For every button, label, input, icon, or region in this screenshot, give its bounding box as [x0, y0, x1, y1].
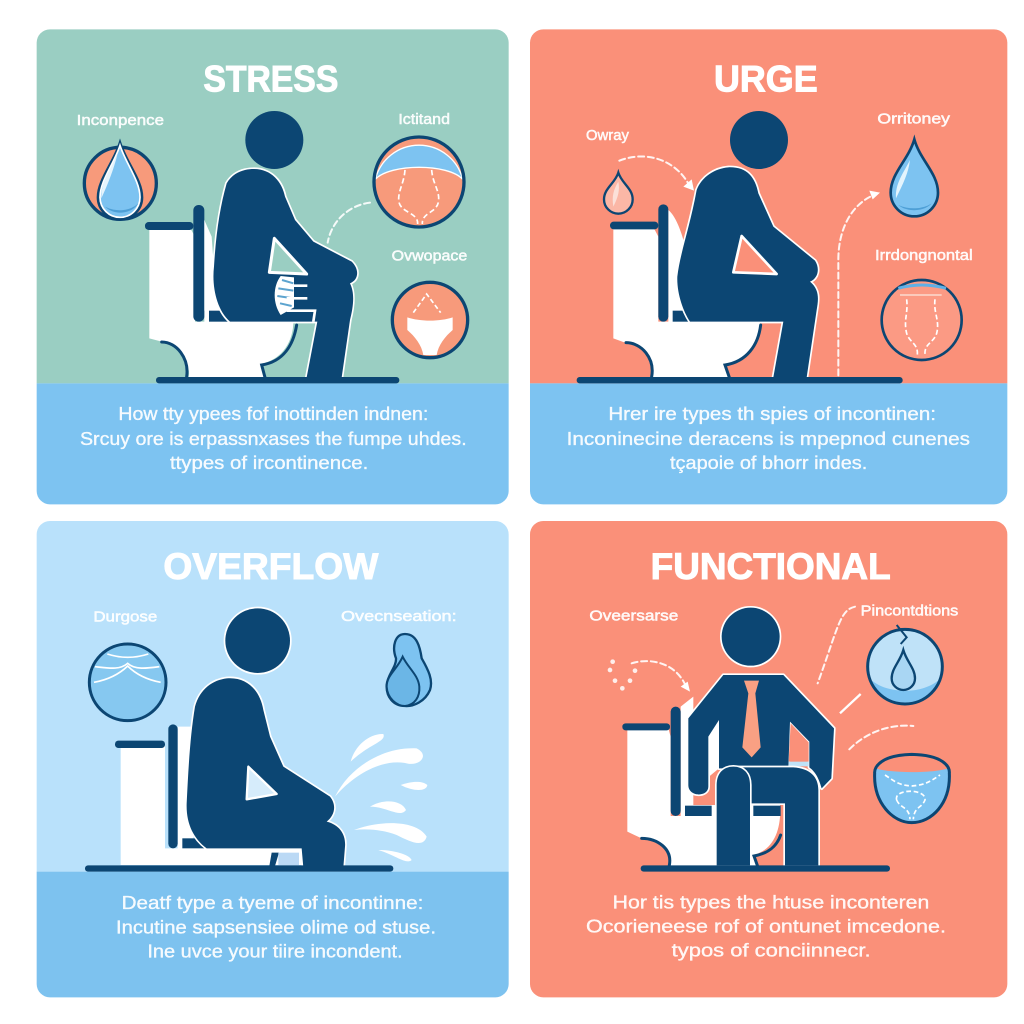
icon: underwear in circle	[392, 282, 468, 358]
label: upper right: Ictitand	[398, 112, 450, 128]
arrow: dashed connector	[328, 203, 370, 243]
text block: ttypes of ircontinence.	[170, 452, 368, 473]
label: left: Inconpence	[77, 113, 164, 129]
panel: stress	[37, 29, 509, 504]
icon: bladder outline	[882, 280, 962, 360]
heading: overflow: OVERFLOW	[163, 546, 379, 587]
icon: drop in circle	[868, 625, 942, 705]
icon: bowl diagram	[875, 754, 949, 823]
heading: urge: URGE	[714, 59, 818, 100]
label: left: Oveersarse	[589, 609, 678, 625]
seated figure	[677, 111, 818, 377]
text block: Ine uvce your tiire incondent.	[147, 940, 403, 961]
arrow: dashed up to drop	[838, 191, 880, 375]
toilet	[610, 204, 768, 377]
text block	[567, 403, 970, 473]
label: lower right: Ovwopace	[392, 249, 467, 265]
arrow: dashed to figure	[619, 156, 694, 191]
label: lower right: Irrdongnontal	[875, 248, 973, 264]
heading: functional: FUNCTIONAL	[651, 546, 891, 587]
seated figure	[187, 608, 345, 867]
floor line	[641, 865, 890, 872]
splash	[335, 734, 427, 861]
label: upper right: Orritoney	[877, 111, 951, 127]
floor line	[85, 865, 393, 872]
text block: Ocorieneese rof of ontunet imcedone.	[586, 916, 946, 937]
text block	[586, 891, 946, 961]
icon: bladder cross-section	[374, 137, 464, 227]
text block: typos of conciinnecr.	[672, 940, 871, 961]
arrow: dashed to upper icon	[818, 607, 855, 683]
label: left: Owray	[586, 128, 630, 144]
text block: Hor tis types the htuse inconteren	[613, 891, 929, 912]
label: right: Ovecnseation:	[341, 609, 457, 625]
icon: drop in circle	[84, 143, 156, 219]
text block: tçapoie of bhorr indes.	[670, 452, 867, 473]
text block	[116, 892, 436, 961]
icon: double drop	[387, 634, 431, 706]
text block: How tty ypees fof inottinden indnen:	[118, 403, 428, 424]
toilet	[622, 697, 781, 866]
text block: Deatf type a tyeme of incontinne:	[122, 892, 423, 913]
floor line	[156, 377, 399, 383]
arrow: dashed to lower icon	[849, 726, 913, 749]
seated figure	[213, 111, 357, 377]
toilet	[115, 724, 302, 866]
figure with tie	[688, 608, 834, 865]
text block: Incutine sapsensiee olime od stuse.	[116, 916, 436, 937]
toilet	[145, 205, 316, 377]
text block: Srcuy ore is erpassnxases the fumpe uhdes.	[80, 428, 467, 449]
heading: stress: STRESS	[203, 59, 338, 100]
text block: Inconinecine deracens is mpepnod cunenes	[567, 428, 970, 449]
text block	[80, 403, 467, 473]
arrow: dotted loop	[608, 659, 690, 692]
text block: Hrer ire types th spies of incontinen:	[608, 403, 936, 424]
floor line	[577, 377, 903, 383]
icon: small drop	[604, 173, 633, 214]
panel: functional	[530, 521, 1007, 997]
icon: bladder circle	[89, 644, 166, 721]
arrow: solid tick	[840, 694, 861, 713]
icon: large drop	[891, 139, 938, 216]
label: right: Pincontdtions	[861, 604, 958, 620]
panel: overflow	[37, 521, 509, 997]
panel: urge	[530, 29, 1007, 504]
label: left: Durgose	[93, 610, 157, 626]
